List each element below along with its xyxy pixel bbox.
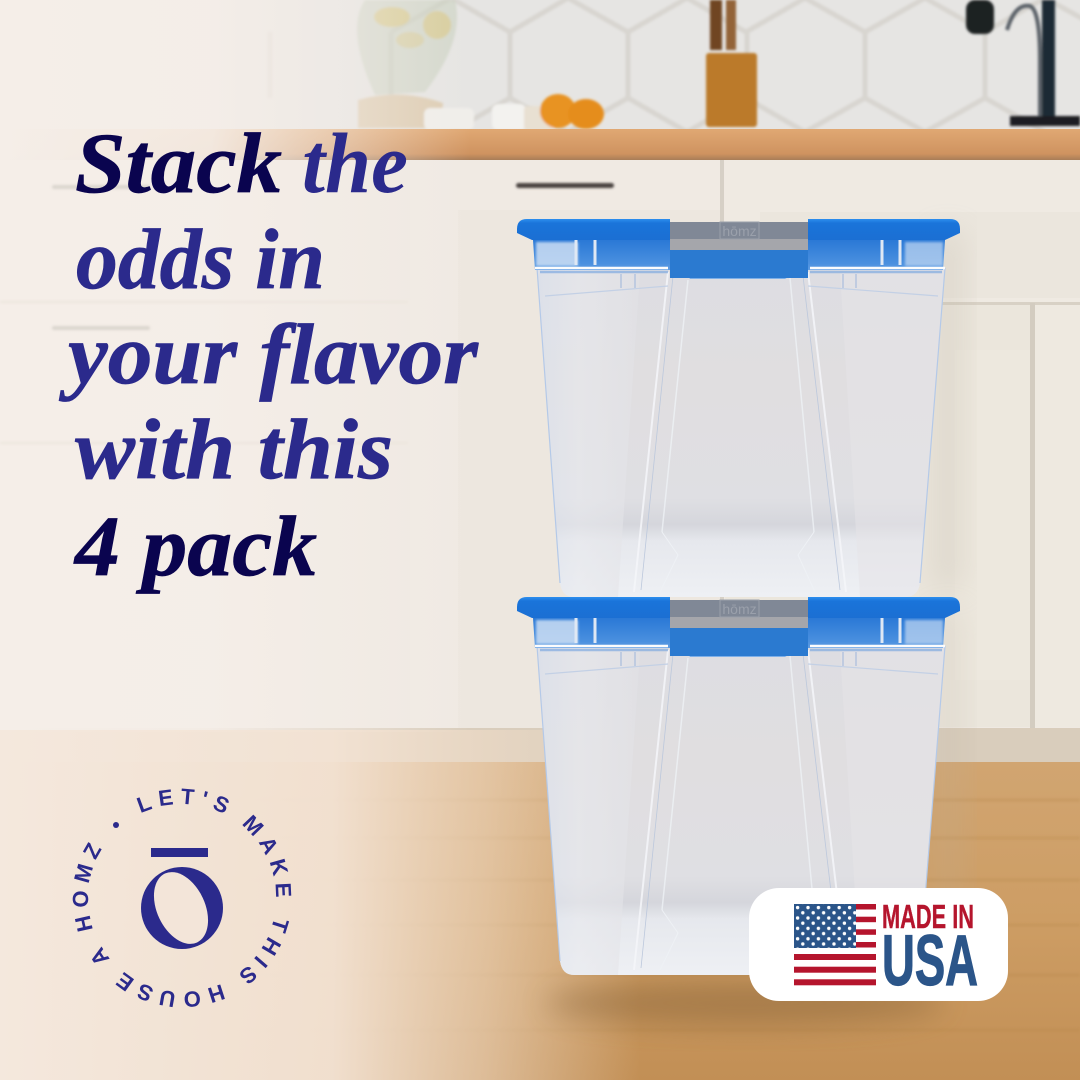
line 1 [75,115,408,211]
US flag [794,904,876,985]
line 2: odds in [76,211,325,307]
storage box: top [517,219,966,597]
separator dot [113,822,119,828]
USA text: USA [882,922,978,1001]
cream fade over left upper [0,0,470,732]
lid right [808,597,960,618]
grey latch with logo: hōmz [722,601,757,617]
baseboard [0,728,1080,765]
floor shadow under storage boxes [545,981,945,1025]
line 1: Stack [75,115,282,211]
made in USA badge [749,888,1008,1001]
lid underside, blue [533,618,945,657]
line 3: your flavor [59,306,480,402]
cream fade over left floor [0,730,640,1080]
letter o mark [141,863,223,953]
lid right [808,219,960,240]
box body [537,646,945,975]
wooden floor [0,762,1080,1080]
grey latch with logo: hōmz [722,223,757,239]
line 4: with this [75,401,393,497]
storage box: bottom [517,597,966,975]
line 5: 4 pack [73,498,317,594]
countertop [0,129,1080,160]
line 1: the [302,115,408,211]
badge background [749,888,1008,1001]
made in text: MADE IN [882,898,974,935]
macron bar [151,848,208,857]
grey latch with logo [670,600,808,628]
faded left cabinet details [0,185,408,443]
shelf decor: plant, pot, cups, oranges, utensil holder, faucet [357,0,1080,130]
headline [59,115,480,594]
lid left [517,219,670,240]
cabinet handles [516,183,926,330]
lid underside, blue [533,240,945,279]
lid left [517,597,670,618]
cabinets [0,158,1080,733]
circular brand badge [72,788,292,1008]
box body [537,268,945,597]
wall with hexagonal tiles [0,0,1080,135]
grey latch with logo [670,222,808,250]
circular slogan: LET'S MAKE THIS HOUSE A HOMZ [72,788,292,1008]
